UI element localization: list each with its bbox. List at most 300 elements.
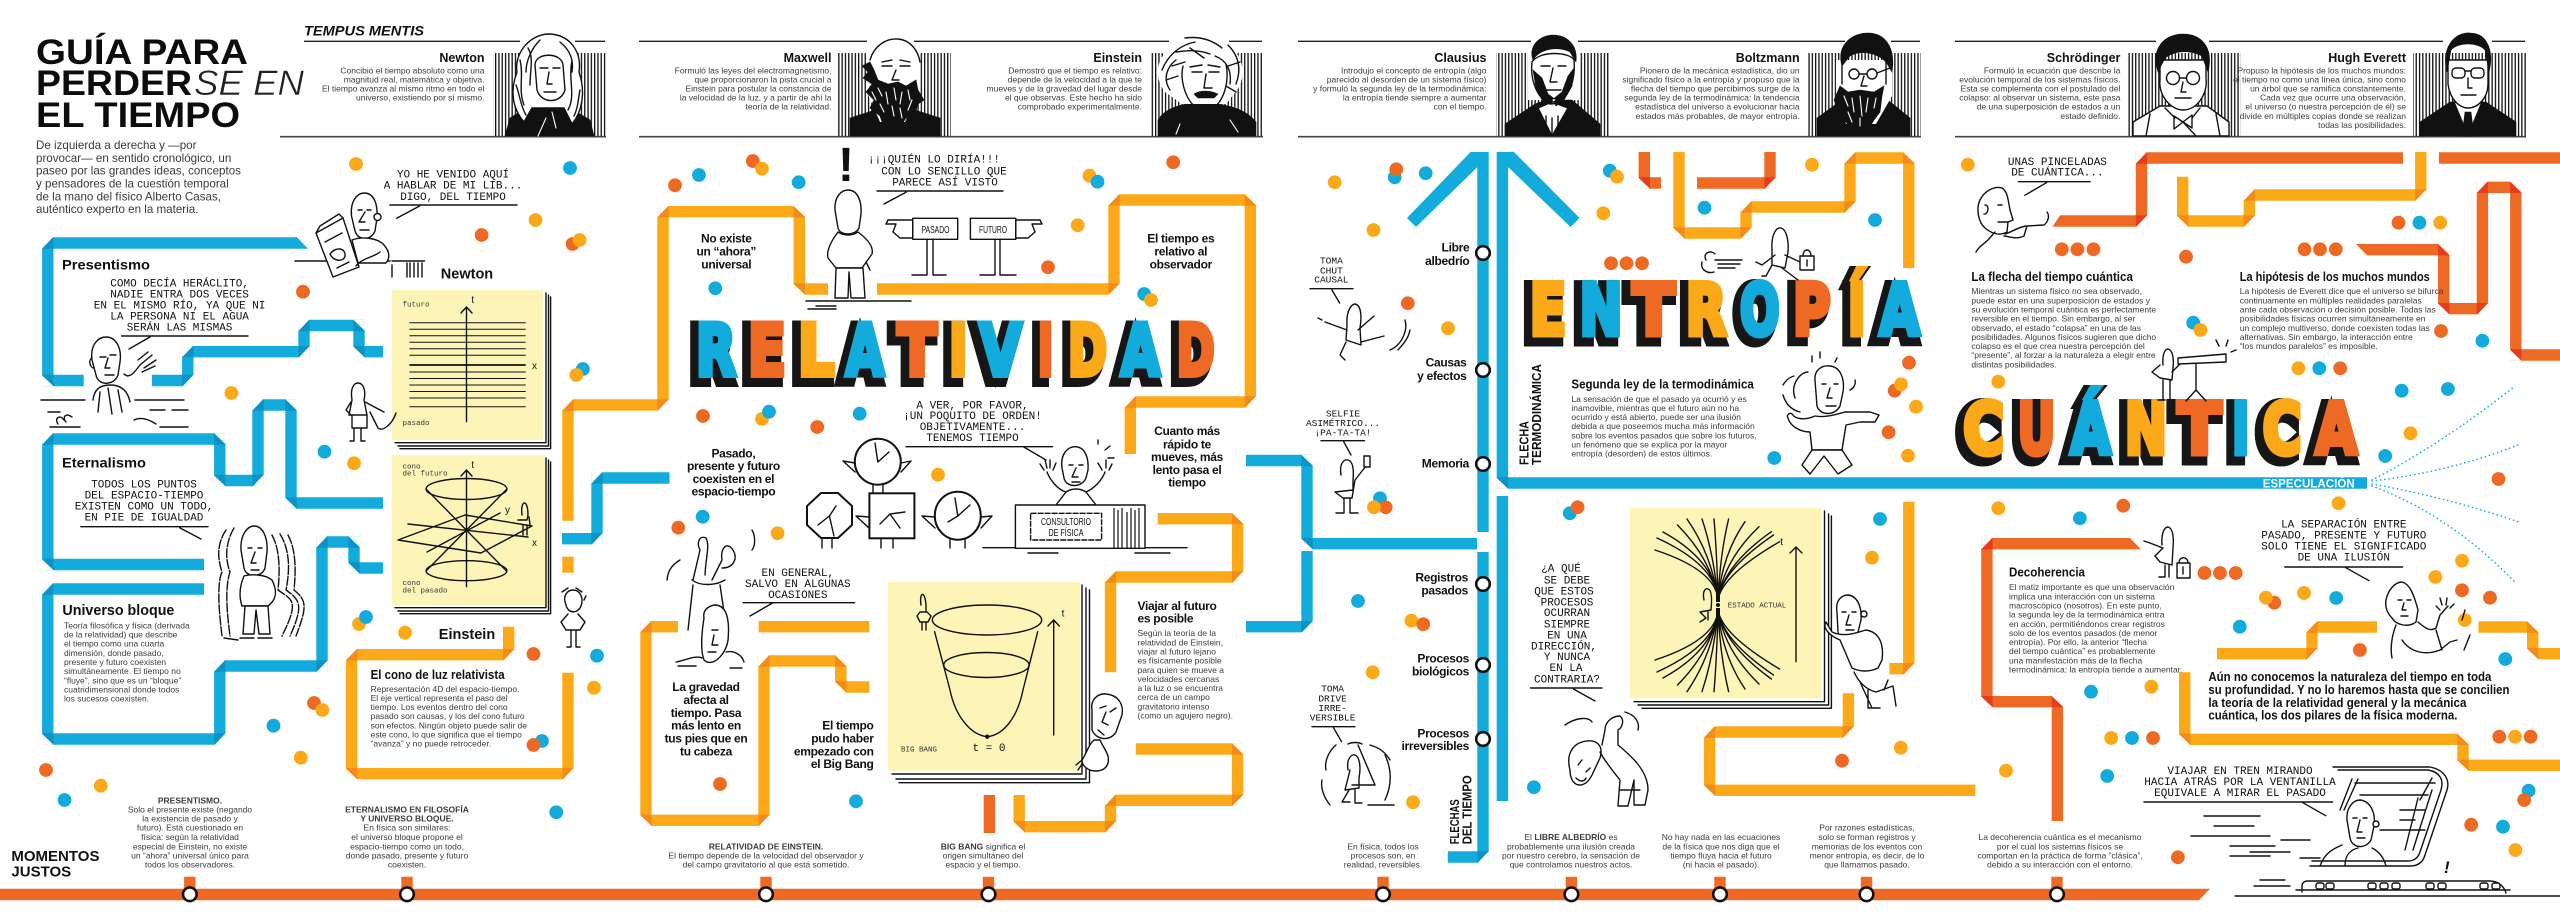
note: presentismo: Solo el presente existe (negando <box>128 805 252 815</box>
speech bubble: eternalismo: DEL ESPACIO-TIEMPO <box>85 491 204 503</box>
icon: Newton portrait <box>493 34 606 136</box>
title: PERDER <box>36 64 192 103</box>
label: flecha termodinámica vertical: FLECHA <box>1518 421 1532 465</box>
note: eternalismo: coexisten. <box>388 859 426 869</box>
panel: light cone text <box>371 667 527 749</box>
figure: physics office: CONSULTORIO <box>1041 516 1091 528</box>
labels: flechas del tiempo stops: y efectos <box>1417 369 1467 383</box>
labels: relatividad statements: No existe <box>701 231 752 245</box>
panel: Clausius bio: parecido al desorden de un sistema físico) <box>1327 74 1487 84</box>
heading: momentos justos: MOMENTOS <box>11 848 99 865</box>
panel: light cone text: son efectos. Ningún objeto puede salir de <box>371 720 527 730</box>
panel: light cone text: El cono de luz relativista <box>371 667 505 682</box>
speech bubble: a qué se debe: ¿A QUÉ <box>1541 562 1581 576</box>
panel: Einstein bio: Demostró que el tiempo es relativo: <box>1008 65 1142 75</box>
big word: RELATIVIDAD: D <box>1063 314 1102 396</box>
confetti dots <box>39 154 2538 864</box>
panel: light cone text: este cono, lo que significa que el tiempo <box>371 730 522 740</box>
icon: signposts pasado futuro: PASADO <box>922 225 950 236</box>
panel: viajar al futuro: Según la teoría de la <box>1138 628 1216 638</box>
labels: flechas del tiempo stops: Procesos <box>1417 726 1470 740</box>
panel: viajar al futuro: relatividad de Einstein, <box>1138 637 1223 647</box>
note: presentismo: especial de Einstein, no existe <box>133 841 247 851</box>
figure: small Einstein <box>561 588 586 647</box>
callout: conclusión: su profundidad. Y no lo haremos hasta que se concilien <box>2208 683 2509 697</box>
labels: flechas del tiempo stops: pasados <box>1421 583 1469 597</box>
panel: Schrödinger bio: estado definido. <box>2060 111 2120 121</box>
speech bubble: selfie: ASIMÉTRICO... <box>1306 418 1380 429</box>
speech bubble: ilusión: LA SEPARACIÓN ENTRE <box>2281 518 2407 532</box>
panel: Boltzmann bio: estados más probables, de mayor entropía. <box>1636 111 1800 121</box>
panel: Universo bloque: Teoría filosófica y física (derivada <box>64 620 190 630</box>
speech bubble: toma drive: IRRE- <box>1318 703 1347 714</box>
panel: Hugh Everett bio: el universo (o nuestra percepción de él) se <box>2245 102 2406 112</box>
panel: hipótesis de los muchos mundos <box>2240 269 2444 351</box>
labels: relatividad statements: universal <box>701 257 751 271</box>
speech bubble: selfie: ¡PA-TA-TA! <box>1314 427 1372 438</box>
label: flechas del tiempo vertical <box>1448 775 1474 844</box>
panel: Clausius bio: con el tiempo. <box>1434 102 1486 112</box>
panel: hipótesis de los muchos mundos: “los mundos paralelos” es imposible. <box>2240 341 2378 351</box>
speech bubble: pasado futuro: ¡¡¡QUIÉN LO DIRÍA!!! <box>868 152 1000 166</box>
labels: relatividad statements: Cuanto más <box>1154 424 1220 438</box>
panel: flecha del tiempo cuántica: La flecha del tiempo cuántica <box>1971 269 2134 284</box>
chart: Einstein light cone card: t <box>471 460 474 471</box>
panel: hipótesis de los muchos mundos: La hipótesis de Everett dice que el universo se bifurca <box>2240 286 2444 296</box>
panel: flecha del tiempo cuántica: “presente”, al forzar a la naturaleza a elegir entre <box>1971 350 2156 360</box>
figure: two-faced man pointing <box>1783 352 1879 474</box>
speech bubble: toma drive: TOMA <box>1321 684 1344 695</box>
labels: relatividad statements: espacio-tiempo <box>691 485 775 499</box>
note: libre albedrío: que controlamos nuestros actos. <box>1510 859 1632 869</box>
big word: RELATIVIDAD: V <box>980 310 1022 392</box>
ribbon: presentismo blue <box>41 236 383 387</box>
panel: viajar al futuro: a la luz o se encuentra <box>1138 683 1223 693</box>
speech bubble: toma drive: DRIVE <box>1318 694 1347 705</box>
note: big bang: origen simultáneo del <box>943 850 1024 860</box>
labels: relatividad statements: Pasado, <box>711 446 755 460</box>
panel: Einstein bio <box>987 37 1263 136</box>
speech bubble: a qué se debe: OCURRAN <box>1544 608 1590 620</box>
chart: Einstein light cone card <box>392 455 551 614</box>
chart: Big Bang expansion card <box>888 582 1090 783</box>
panel: Hugh Everett bio: el tiempo no como una línea única, sino como <box>2233 74 2406 84</box>
labels: relatividad statements: tu cabeza <box>680 745 733 759</box>
speech bubble: toma chut causal <box>1310 255 1353 303</box>
figure: clocks <box>807 439 992 548</box>
panel: segunda ley: sobre los eventos pasados que sobre los futuros, <box>1571 430 1757 440</box>
intro text: paseo por las grandes ideas, conceptos <box>36 165 241 178</box>
figure: man upside-down <box>667 530 755 668</box>
labels: relatividad statements: tiempo. Pasa <box>671 706 742 720</box>
intro text <box>36 139 241 216</box>
panel: flecha del tiempo cuántica: distintas posibilidades. <box>1971 359 2056 369</box>
figure: block universe man <box>219 526 304 640</box>
figure: peeking man <box>1076 694 1122 771</box>
figure: man with telescope <box>2152 340 2236 401</box>
big word: CUÁNTICA: Á <box>2066 393 2106 475</box>
speech bubble: Heráclito <box>94 277 265 349</box>
big word: RELATIVIDAD: D <box>1068 310 1107 392</box>
portrait strip rules <box>280 41 2526 137</box>
big word: RELATIVIDAD: A <box>846 310 884 392</box>
big word: ENTROPÍA: T <box>1628 274 1670 356</box>
note: física reversible: procesos son, en <box>1351 850 1416 860</box>
panel: Eternalismo: Eternalismo <box>62 454 146 470</box>
panel: Maxwell bio: teoría de la relatividad. <box>746 102 832 112</box>
speech bubble: ilusión: SOLO TIENE EL SIGNIFICADO <box>2261 542 2427 554</box>
big word: RELATIVIDAD: I <box>1038 310 1053 392</box>
panel: Universo bloque: los sucesos coexisten. <box>64 694 149 704</box>
callout: conclusión <box>2208 670 2509 723</box>
speech bubble: toma chut causal: CHUT <box>1320 265 1343 276</box>
panel: Clausius bio: Clausius <box>1434 51 1487 65</box>
big word: CUÁNTICA: A <box>2311 393 2352 475</box>
panel: Hugh Everett bio: Cada vez que ocurre una observación, <box>2260 93 2406 103</box>
panel: Einstein bio: el que observas. Este hecho ha sido <box>1005 93 1142 103</box>
title: SE EN <box>194 64 305 103</box>
panel: decoherencia: termodinámica: la entropía tiende a aumentar. <box>2009 664 2182 674</box>
big word: RELATIVIDAD: E <box>748 310 786 392</box>
panel: Hugh Everett bio <box>2233 33 2526 136</box>
note: presentismo: física: según la relatividad <box>141 832 239 842</box>
speech bubble: eternalismo <box>75 480 213 539</box>
labels: relatividad statements: empezado con <box>794 744 874 758</box>
chart: Big Bang expansion card: BIG BANG <box>901 747 938 755</box>
heading: Newton diagram: Newton <box>441 266 493 282</box>
panel: Clausius bio: la entropía tiende siempre a aumentar <box>1343 93 1487 103</box>
speech bubble: Heráclito: LA PERSONA NI EL AGUA <box>110 311 249 323</box>
chart: Newton absolute time card: futuro <box>402 302 430 310</box>
speech bubble: orden: ¡UN POQUITO DE ORDEN! <box>903 411 1042 423</box>
panel: Universo bloque: presente y futuro coexisten <box>64 657 166 667</box>
big word: RELATIVIDAD: T <box>898 310 937 392</box>
big word: ENTROPÍA: A <box>1875 274 1915 356</box>
ribbon: relatividad top left orange <box>562 205 828 573</box>
note: decoherencia: debido a su interacción con el entorno. <box>1987 859 2133 869</box>
chart: Einstein light cone card: cono <box>402 580 421 588</box>
speech bubble: pasado futuro <box>868 152 1007 204</box>
note: ecuaciones: (ni hacia el pasado). <box>1683 859 1759 869</box>
labels: flechas del tiempo stops <box>1402 241 1470 753</box>
big word: ENTROPÍA: R <box>1686 270 1726 352</box>
speech bubble: tren: VIAJAR EN TREN MIRANDO <box>2167 766 2313 778</box>
figure: train and passenger: ! <box>2444 858 2450 877</box>
panel: Maxwell bio: la velocidad de la luz, y a partir de ahí la <box>680 93 832 103</box>
panel: hipótesis de los muchos mundos: continuamente en múltiples realidades paralelas <box>2240 295 2422 305</box>
speech bubble: pinceladas: UNAS PINCELADAS <box>2008 157 2107 169</box>
panel: Boltzmann bio: flecha del tiempo que percibimos surge de la <box>1631 84 1800 94</box>
panel: flecha del tiempo cuántica: observado, el estado “colapsa” en una de las <box>1971 323 2141 333</box>
big word: CUÁNTICA: C <box>1963 389 2004 471</box>
intro text: De izquierda a derecha y —por <box>36 139 197 152</box>
speech bubble: pinceladas: DE CUÁNTICA... <box>2011 166 2104 180</box>
panel: flecha del tiempo cuántica: posibilidades. Algunos físicos sugieren que dicho <box>1971 332 2156 342</box>
note: big bang: espacio y el tiempo. <box>945 859 1021 869</box>
arrow: flechas del tiempo <box>1407 152 1490 864</box>
title: GUÍA PARA <box>36 32 248 72</box>
label: flecha termodinámica vertical <box>1518 364 1544 465</box>
panel: decoherencia: entropía). Por ello, la anterior “flecha <box>2009 637 2147 647</box>
note: relatividad: El tiempo depende de la velocidad del observador y <box>668 850 864 860</box>
chart: Newton absolute time card: x <box>532 361 537 372</box>
panel: decoherencia: solo de los eventos pasados (de menor <box>2009 628 2158 638</box>
labels: relatividad statements: el Big Bang <box>811 757 874 771</box>
panel: viajar al futuro: es físicamente posible <box>1138 656 1222 666</box>
figure: small Newton with pendulum <box>346 383 396 441</box>
panel: Hugh Everett bio: divide en múltiples copias donde se realizan <box>2240 111 2406 121</box>
labels: flechas del tiempo stops: Libre <box>1442 241 1470 255</box>
panel: Boltzmann bio <box>1622 33 1921 136</box>
speech bubble: Heráclito: SERÁN LAS MISMAS <box>127 320 233 334</box>
figure: man with book <box>295 193 424 277</box>
big word: RELATIVIDAD: T <box>893 314 932 396</box>
panel: light cone text: El eje vertical representa el paso del <box>371 693 508 703</box>
ribbon: gravedad orange <box>640 620 869 827</box>
label: flecha termodinámica vertical: TERMODINÁMICA <box>1529 364 1544 465</box>
labels: relatividad statements: más lento en <box>671 719 741 733</box>
big word: RELATIVIDAD: A <box>1121 310 1160 392</box>
panel: Maxwell bio: Einstein para postular la constancia de <box>685 84 832 94</box>
panel: Newton bio: magnitud real, matemática y objetiva. <box>344 74 484 84</box>
big word: ENTROPÍA: T <box>1633 270 1675 352</box>
panel: viajar al futuro: cerca de un campo <box>1138 692 1210 702</box>
panel: light cone text: Representación 4D del espacio-tiempo. <box>371 684 519 694</box>
panel: viajar al futuro: (como un agujero negro). <box>1138 710 1233 720</box>
labels: relatividad statements: tiempo <box>1168 476 1206 490</box>
panel: Clausius bio <box>1313 35 1609 136</box>
figure: train and passenger <box>2191 767 2560 896</box>
panel: segunda ley <box>1571 376 1757 459</box>
panel: Maxwell bio: que proporcionaron la pista crucial a <box>694 74 832 84</box>
panel: Universo bloque: de la relatividad) que describe <box>64 630 178 640</box>
note: libre albedrío: probablemente una ilusión creada <box>1507 841 1635 851</box>
speech bubble: a qué se debe: QUE ESTOS <box>1534 586 1594 598</box>
label: flechas del tiempo vertical: FLECHAS <box>1448 799 1462 844</box>
chart: entropy fan card: t <box>1780 537 1783 548</box>
big word: ENTROPÍA: N <box>1580 270 1622 352</box>
note: presentismo: la existencia de pasado y <box>142 814 238 824</box>
panel: Boltzmann bio: segunda ley de la termodinámica: la tendencia <box>1624 93 1800 103</box>
panel: decoherencia <box>2009 565 2182 674</box>
speech bubble: tren <box>2144 766 2336 816</box>
panel: Newton bio: Newton <box>439 51 484 65</box>
figure: man with head in hands <box>1565 712 1648 806</box>
speech bubble: eternalismo: TODOS LOS PUNTOS <box>91 480 197 492</box>
note: eternalismo: En física son similares: <box>364 823 450 833</box>
panel: Maxwell bio <box>675 39 951 136</box>
labels: flechas del tiempo stops: Causas <box>1426 356 1467 370</box>
panel: light cone text: tiempo. Los eventos dentro del cono <box>371 702 508 712</box>
big word: ENTROPÍA: Í <box>1848 270 1865 352</box>
icon: Maxwell portrait <box>838 39 951 136</box>
panel: flecha del tiempo cuántica: su evolución temporal cuántica es perfectamente <box>1971 304 2156 314</box>
labels: flechas del tiempo stops: Registros <box>1415 571 1469 585</box>
ribbon: relatividad top right orange <box>877 194 1257 454</box>
speech bubble: a qué se debe: CONTRARIA? <box>1534 674 1600 686</box>
speech bubble: book author <box>384 168 522 218</box>
callout: conclusión: Aún no conocemos la naturaleza del tiempo en toda <box>2208 670 2492 684</box>
speech bubble: eternalismo: EXISTEN COMO UN TODO, <box>75 502 213 514</box>
big word: RELATIVIDAD: A <box>841 314 879 396</box>
note: libre albedrío: El LIBRE ALBEDRÍO es <box>1524 832 1618 842</box>
big word: CUÁNTICA: N <box>2120 393 2162 475</box>
big word: ENTROPÍA: E <box>1530 270 1566 352</box>
panel: Eternalismo <box>62 454 213 539</box>
panel: flecha del tiempo cuántica <box>1971 269 2156 369</box>
figure: painter with bucket <box>2144 527 2190 578</box>
intro text: auténtico experto en la materia. <box>36 203 198 216</box>
big word: RELATIVIDAD: V <box>975 314 1017 396</box>
labels: flechas del tiempo stops: biológicos <box>1412 665 1470 679</box>
panel: Universo bloque <box>62 602 190 704</box>
panel: Einstein bio: mueves y de la gravedad del lugar desde <box>987 84 1142 94</box>
panel: segunda ley: debida a que poseemos mucha más información <box>1571 421 1755 431</box>
figure: leaning man <box>1825 595 1896 708</box>
panel: decoherencia: macroscópico (nosotros). En este punto, <box>2009 600 2162 610</box>
figure: golfer <box>1322 742 1394 805</box>
callout: conclusión: cuántica, los dos pilares de la física moderna. <box>2208 709 2457 723</box>
panel: Boltzmann bio: estadística del universo a evolucionar hacia <box>1635 102 1800 112</box>
panel: decoherencia: del tiempo cuántica” es probablemente <box>2009 646 2156 656</box>
title: EL TIEMPO <box>36 96 240 135</box>
note: física reversible: En física, todos los <box>1347 841 1419 851</box>
panel: Universo bloque: simultáneamente. El tiempo no <box>64 666 181 676</box>
labels: relatividad statements: tus pies que en <box>665 732 747 746</box>
note: decoherencia: comportan en la práctica de forma “clásica”, <box>1977 850 2143 860</box>
note: decoherencia: La decoherencia cuántica es el mecanismo <box>1978 832 2142 842</box>
figure: physics office: DE FÍSICA <box>1048 526 1084 539</box>
speech bubble: a qué se debe: PROCESOS <box>1541 597 1594 609</box>
big word: RELATIVIDAD: L <box>793 314 830 396</box>
big word: ENTROPÍA: E <box>1525 274 1562 356</box>
big word: RELATIVIDAD: R <box>696 310 736 392</box>
chart: Einstein light cone card: del futuro <box>402 471 448 479</box>
panel: flecha del tiempo cuántica: puede estar en una superposición de estados y <box>1971 295 2151 305</box>
panel: flecha del tiempo cuántica: reversible en el tiempo. Sin embargo, al ser <box>1971 314 2136 324</box>
panel: viajar al futuro: para quien se mueve a <box>1138 665 1224 675</box>
note: eternalismo: espacio-tiempo como un todo, <box>350 841 464 851</box>
big word: RELATIVIDAD: D <box>1172 314 1210 396</box>
speech bubble: gravedad: OCASIONES <box>768 590 828 602</box>
note: relatividad: del campo gravitatorio al que está sometido. <box>683 859 849 869</box>
panel: Schrödinger bio: de una superposición de estados a un <box>1977 102 2121 112</box>
figure: Heraclitus in river <box>41 337 188 427</box>
panel: viajar al futuro: velocidades cercanas <box>1138 674 1219 684</box>
big word: CUÁNTICA: C <box>2258 393 2297 475</box>
ribbon: entropia red pieces <box>1638 152 1776 190</box>
panel: Schrödinger bio: colapso: al observar un sistema, este pasa <box>1959 93 2121 103</box>
ribbon: entropia orange <box>1672 152 1915 268</box>
labels: flechas del tiempo stops: irreversibles <box>1402 739 1470 753</box>
speech bubble: book author: YO HE VENIDO AQUÍ <box>397 168 509 182</box>
panel: Boltzmann bio: Pionero de la mecánica estadística, dio un <box>1640 65 1800 75</box>
speech bubble: a qué se debe: EN LA <box>1549 663 1583 675</box>
speech bubble: orden: TENEMOS TIEMPO <box>926 433 1019 445</box>
callout: conclusión: la teoría de la relatividad general y la mecánica <box>2208 696 2467 710</box>
panel: Universo bloque: cuatridimensional donde todos <box>64 684 179 694</box>
figure: kicking stick man <box>1318 304 1410 360</box>
speech bubble: selfie <box>1306 409 1380 455</box>
labels: relatividad statements: rápido te <box>1163 437 1212 451</box>
panel: segunda ley: inamovible, mientras que el futuro aún no ha <box>1571 403 1739 413</box>
big word: RELATIVIDAD: E <box>743 314 781 396</box>
panel: segunda ley: un fenómeno que se explica por la mayor <box>1571 440 1727 450</box>
ribbon: cuantica orange top <box>2176 152 2427 228</box>
panel: decoherencia: implica una interacción con un sistema <box>2009 591 2155 601</box>
speech bubble: tren: HACIA ATRÁS POR LA VENTANILLA <box>2144 775 2336 789</box>
panel: decoherencia: Decoherencia <box>2009 565 2086 580</box>
note: presentismo: futuro). Está cuestionado en <box>137 823 243 833</box>
labels: relatividad statements: El tiempo <box>822 718 874 732</box>
big word: ENTROPÍA: Í <box>1843 274 1860 356</box>
speech bubble: pasado futuro: CON LO SENCILLO QUE <box>881 166 1007 178</box>
panel: segunda ley: Segunda ley de la termodinámica <box>1571 376 1754 391</box>
note: física reversible: realidad, reversibles. <box>1344 859 1422 869</box>
icon: Einstein portrait <box>1150 37 1263 136</box>
panel: Maxwell bio: Formuló las leyes del electromagnetismo, <box>675 65 832 75</box>
note: ecuaciones: No hay nada en las ecuaciones <box>1662 832 1780 842</box>
panel: Presentismo: Presentismo <box>62 256 150 272</box>
panel: Schrödinger bio: evolución temporal de los sistemas físicos. <box>1959 74 2120 84</box>
title <box>36 32 305 135</box>
panel: Einstein bio: comprobado experimentalmente. <box>1018 102 1142 112</box>
speech bubble: orden: A VER, POR FAVOR, <box>916 400 1029 412</box>
note: eternalismo: el universo bloque propone el <box>351 832 463 842</box>
icon: signposts pasado futuro <box>886 218 1042 275</box>
panel: Boltzmann bio: Boltzmann <box>1736 51 1800 65</box>
heading: momentos justos: JUSTOS <box>11 864 71 881</box>
big word: ENTROPÍA: N <box>1575 274 1617 356</box>
note: presentismo: PRESENTISMO. <box>158 795 222 805</box>
panel: Clausius bio: y formuló la segunda ley de la termodinámica: <box>1313 84 1486 94</box>
note: razones estadísticas: solo se forman registros y <box>1818 832 1916 842</box>
note: presentismo: todos los observadores. <box>145 859 235 869</box>
icon: Schrödinger portrait <box>2128 34 2241 136</box>
note: razones estadísticas: Por razones estadísticas, <box>1819 823 1915 833</box>
panel: Schrödinger bio: Schrödinger <box>2047 51 2121 65</box>
labels: relatividad statements: pudo haber <box>811 731 874 745</box>
speech bubble: a qué se debe: Y NUNCA <box>1544 652 1590 664</box>
big word: ENTROPÍA: P <box>1793 270 1831 352</box>
icon: Clausius portrait <box>1496 35 1609 136</box>
chart: Big Bang expansion card: t = 0 <box>972 743 1006 755</box>
speech bubble: pasado futuro: PARECE ASÍ VISTO <box>892 175 998 189</box>
big word: ENTROPÍA: P <box>1788 274 1826 356</box>
speech bubble: orden: OBJETIVAMENTE... <box>920 422 1025 434</box>
labels: relatividad statements <box>665 231 1224 771</box>
panel: hipótesis de los muchos mundos: posibilidades físicas ocurren simultáneamente en <box>2240 314 2426 324</box>
labels: relatividad statements: un “ahora” <box>696 244 756 258</box>
big word: CUÁNTICA: T <box>2178 389 2222 471</box>
speech bubble: eternalismo: EN PIE DE IGUALDAD <box>85 513 204 525</box>
chart: Einstein light cone card: x <box>532 538 537 549</box>
panel: decoherencia: la segunda ley de la termodinámica entra <box>2009 610 2165 620</box>
panel: viajar al futuro: viajar al futuro lejano <box>1138 646 1216 656</box>
speech bubble: gravedad: SALVO EN ALGUNAS <box>745 579 851 591</box>
speech bubble: selfie: SELFIE <box>1326 409 1360 420</box>
icon: signposts pasado futuro: FUTURO <box>979 225 1007 236</box>
big word: CUÁNTICA: T <box>2173 393 2217 475</box>
speech bubble: book author: DIGO, DEL TIEMPO <box>400 192 506 204</box>
panel: Schrödinger bio: Esta se complementa con el postulado del <box>1961 84 2120 94</box>
speech bubble: pinceladas <box>2008 157 2107 195</box>
labels: relatividad statements: presente y futuro <box>687 459 780 473</box>
big word: ENTROPÍA: A <box>1880 270 1920 352</box>
ribbon: final orange pieces <box>2178 620 2560 772</box>
panel: Clausius bio: Introdujo el concepto de entropía (algo <box>1341 65 1487 75</box>
note: ecuaciones: de la física que nos diga que el <box>1662 841 1780 851</box>
